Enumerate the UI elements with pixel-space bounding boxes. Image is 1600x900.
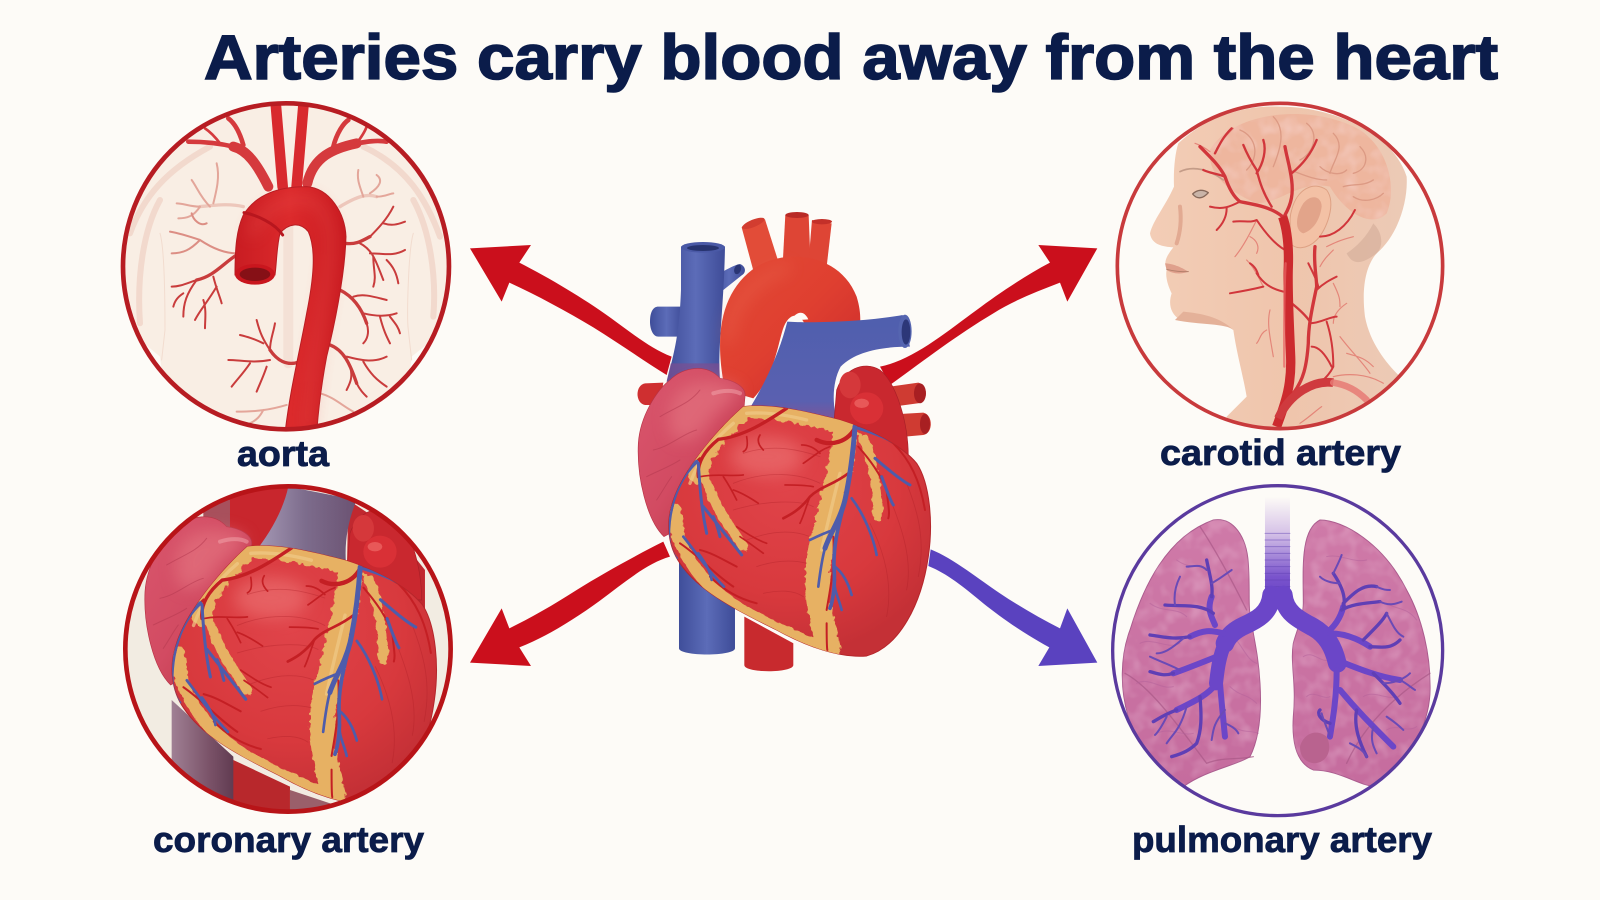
red arterial branches [170, 207, 405, 397]
carotid circle border [1117, 103, 1443, 429]
aortic arch [720, 212, 860, 398]
face details [1165, 169, 1233, 330]
trachea [1264, 502, 1290, 588]
right lung [1292, 520, 1430, 787]
left atrium [833, 366, 908, 457]
label: pulmonary artery: pulmonary artery [1132, 819, 1432, 860]
pulmonary artery branches [1150, 555, 1415, 757]
pulmonary trunk [747, 315, 912, 430]
background behind heart [120, 483, 457, 817]
carotid branches [1200, 128, 1367, 427]
left atrium close-up [347, 509, 422, 600]
inferior vessels [679, 557, 793, 671]
pulmonary circle border [1113, 486, 1443, 816]
right atrium close-up [145, 517, 252, 685]
ear [1290, 186, 1331, 248]
panel: carotid artery [1117, 103, 1443, 433]
upper neck and shoulder arteries [188, 107, 387, 187]
right atrium [638, 368, 745, 537]
label: aorta: aorta [237, 433, 330, 474]
ventricle with coronary vessels [668, 406, 931, 656]
arrow: heart to aorta [470, 245, 672, 375]
head and neck [1150, 107, 1407, 433]
pale arterial web [1195, 128, 1383, 423]
title: Arteries carry blood away from the heart [204, 23, 1498, 93]
label: carotid artery: carotid artery [1160, 432, 1401, 473]
central heart illustration [637, 212, 931, 671]
left lung [1122, 520, 1261, 787]
neck shadow [1347, 223, 1381, 262]
left and right pulmonary stubs [637, 383, 931, 437]
brain [1210, 114, 1391, 219]
label: coronary artery: coronary artery [153, 819, 424, 860]
faint arterial branches [177, 163, 393, 423]
torso background [120, 100, 453, 437]
panel: pulmonary artery [1113, 486, 1443, 816]
coronary circle border [125, 486, 451, 812]
arrow: heart to carotid artery [880, 245, 1097, 385]
superior vena cava [650, 242, 745, 382]
panel: aorta [120, 100, 453, 437]
aorta vessel [235, 187, 346, 433]
ventricle close-up [172, 546, 436, 804]
arrow: heart to pulmonary artery [928, 549, 1097, 666]
panel: coronary artery [120, 483, 457, 817]
arrow: heart to coronary artery [470, 542, 670, 666]
aorta circle border [123, 103, 449, 429]
